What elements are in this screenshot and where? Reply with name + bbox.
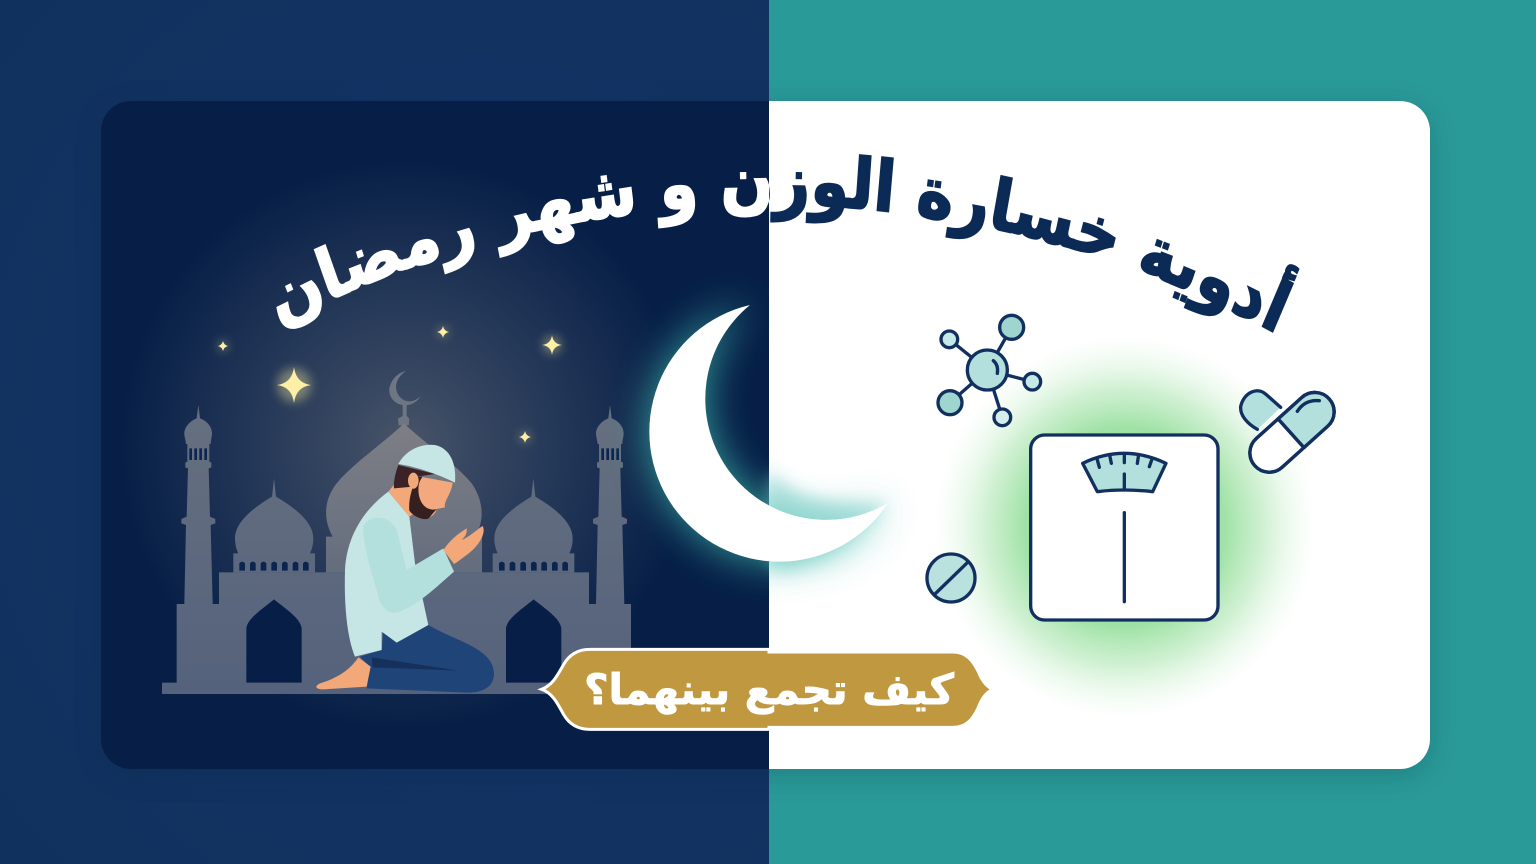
background: navy left half [0,0,769,864]
title [276,154,1300,333]
icon: molecule [938,315,1041,426]
gold badge [542,649,993,729]
hands [443,526,484,564]
hair [394,465,435,488]
praying man [316,445,494,693]
ear [408,473,419,489]
panel: white side [769,101,1430,769]
star shapes [218,326,562,443]
icon: bathroom scale [1031,435,1218,620]
mosque silhouette [162,371,645,694]
crescent moon glow [649,305,888,562]
green glow behind scale [933,335,1317,719]
panel: night side [101,101,769,769]
star glows [218,327,561,442]
crescent moon [649,305,888,562]
background: teal right half [769,0,1536,864]
icon: capsule [1241,385,1342,480]
half tablet [1241,391,1281,429]
icons on white panel [927,315,1342,620]
title: white part on dark: أدوية خسارة الوزن و شهر رمضان [276,172,769,329]
card shadow [101,107,1430,775]
icon: round tablet [927,554,975,602]
sleeve [363,518,454,613]
face [413,477,453,517]
badge question text: كيف تجمع بينهما؟ [584,665,954,715]
beard [409,477,437,519]
neck [388,480,420,517]
stars [218,326,562,443]
shirt [345,492,428,657]
trousers [360,625,494,693]
crescent shadow on white [769,470,888,570]
foot [316,657,371,689]
cap [398,445,455,483]
title: navy part on white: أدوية خسارة الوزن و شهر رمضان [769,154,1300,333]
